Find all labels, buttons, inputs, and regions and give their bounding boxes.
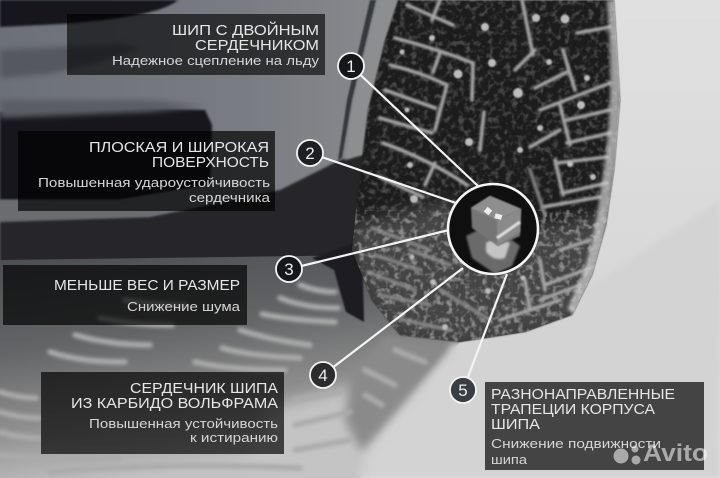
connector lines from badges to the stud lens: [289, 66, 507, 390]
stud base: [466, 230, 520, 274]
panel 4: tungsten carbide core: [41, 372, 284, 454]
panel 1: double core stud: [67, 14, 325, 75]
badge 3: 3: [284, 260, 294, 279]
panel 3: less weight and size: Снижение шума: [127, 300, 240, 314]
panel 5: multidirectional trapezoids: РАЗНОНАПРАВЛЕННЫЕ: [491, 386, 675, 403]
panel 3: less weight and size: [3, 265, 247, 325]
panel 3: less weight and size: МЕНЬШЕ ВЕС И РАЗМЕР: [54, 277, 240, 294]
badge 1: 1: [346, 57, 356, 76]
badge 5: [450, 377, 476, 403]
snow with tire tracks: [0, 200, 720, 478]
panel 5: multidirectional trapezoids: ТРАПЕЦИИ КОРПУСА: [491, 401, 655, 418]
badge 4: 4: [318, 366, 328, 385]
panel 2: flat and wide surface: сердечника: [189, 191, 270, 205]
badge 5: 5: [458, 381, 468, 400]
stud top block: [471, 196, 521, 246]
badge 3: [276, 256, 302, 282]
panel 4: tungsten carbide core: Повышенная устойчивость: [89, 417, 278, 431]
Avito watermark: [614, 440, 708, 467]
panel 2: flat and wide surface: ПОВЕРХНОСТЬ: [152, 154, 269, 171]
car body: [0, 0, 410, 262]
panel 5: multidirectional trapezoids: [485, 382, 704, 470]
panel 4: tungsten carbide core: ИЗ КАРБИДО ВОЛЬФРАМА: [71, 395, 278, 412]
badge 2: [297, 140, 323, 166]
panel 2: flat and wide surface: Повышенная удароустойчивость: [38, 176, 270, 190]
mud flap: [312, 240, 364, 322]
Avito watermark: Avito: [643, 440, 708, 467]
panel 2: flat and wide surface: ПЛОСКАЯ И ШИРОКАЯ: [89, 139, 269, 156]
panel 1: double core stud: СЕРДЕЧНИКОМ: [195, 37, 319, 54]
panel 4: tungsten carbide core: к истиранию: [190, 431, 278, 445]
badge 2: 2: [305, 144, 315, 163]
panel 1: double core stud: Надежное сцепление на льду: [112, 54, 320, 68]
panel 5: multidirectional trapezoids: Снижение подвижности: [491, 437, 661, 451]
panel 5: multidirectional trapezoids: шипа: [491, 453, 527, 467]
panel 2: flat and wide surface: [18, 131, 275, 211]
badge 1: [338, 53, 364, 79]
panel 5: multidirectional trapezoids: ШИПА: [491, 416, 540, 433]
stud lens: magnified stud icon: [448, 184, 538, 274]
panel 1: double core stud: ШИП С ДВОЙНЫМ: [172, 21, 319, 39]
badge 4: [310, 362, 336, 388]
tire: [350, 0, 625, 350]
panel 4: tungsten carbide core: СЕРДЕЧНИК ШИПА: [130, 380, 278, 397]
